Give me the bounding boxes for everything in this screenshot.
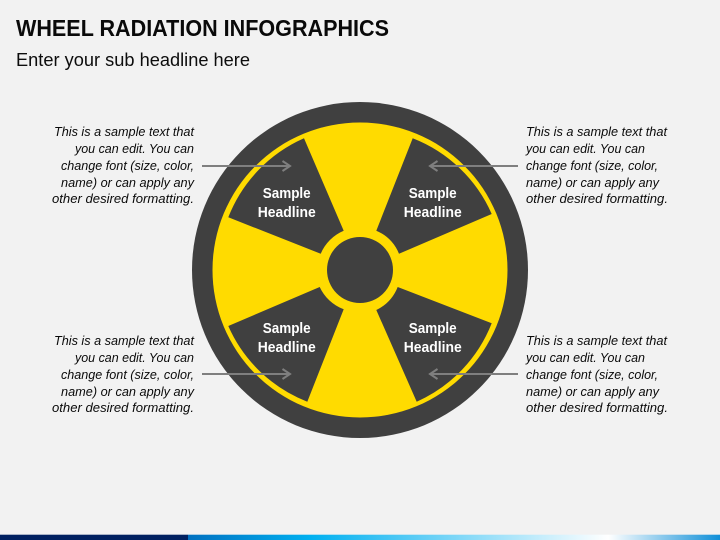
text block: bottom right: you can edit. You can [525,351,645,365]
text block: bottom left: you can edit. You can [74,351,194,365]
text block: bottom left: other desired formatting. [52,401,194,415]
text block: bottom right [525,334,668,415]
text block: top right: you can edit. You can [525,142,645,156]
text block: bottom left: change font (size, color, [61,368,194,382]
text block: bottom right: change font (size, color, [526,368,658,382]
arrow: bottom left [202,369,290,379]
text block: top right: change font (size, color, [526,159,658,173]
headline: bottom right: Sample [409,320,457,337]
yellow disc [212,122,508,418]
title: WHEEL RADIATION INFOGRAPHICS [16,15,389,41]
outer dark ring [192,102,528,438]
headline: top right: Headline [404,204,462,221]
text block: bottom left: name) or can apply any [61,385,195,399]
headline: bottom left [258,320,316,356]
wedge: bottom right [376,287,492,402]
centre hub [327,237,393,303]
radiation wheel [192,102,528,438]
arrow: bottom right [430,369,518,379]
text block: top left: name) or can apply any [61,176,195,190]
headline: bottom left: Headline [258,339,316,356]
wedge: top left [228,138,344,254]
text block: top left: change font (size, color, [61,159,194,173]
text block: top left: other desired formatting. [52,192,194,206]
arrow: top right [430,161,518,171]
headline: top right: Sample [409,185,457,202]
subtitle: Enter your sub headline here [16,49,250,70]
headline: top right [404,185,462,221]
text block: top right [525,125,668,206]
text block: top right: other desired formatting. [526,192,668,206]
text block: top left: This is a sample text that [54,125,195,139]
text block: bottom right: other desired formatting. [526,401,668,415]
headline: top left [258,185,316,221]
text block: bottom right: This is a sample text that [526,334,668,348]
headline: bottom right: Headline [404,339,462,356]
arrow: top left [202,161,290,171]
text block: bottom left [52,334,195,415]
text block: bottom left: This is a sample text that [54,334,195,348]
wedge: top right [376,138,492,254]
footer bar [0,535,720,540]
text block: top right: name) or can apply any [526,176,660,190]
headline: bottom right [404,320,462,356]
text block: top left: you can edit. You can [74,142,194,156]
wedge: bottom left [228,287,344,402]
headline: top left: Sample [263,185,311,202]
text block: bottom right: name) or can apply any [526,385,660,399]
text block: top left [52,125,195,206]
headline: top left: Headline [258,204,316,221]
text block: top right: This is a sample text that [526,125,668,139]
headline: bottom left: Sample [263,320,311,337]
